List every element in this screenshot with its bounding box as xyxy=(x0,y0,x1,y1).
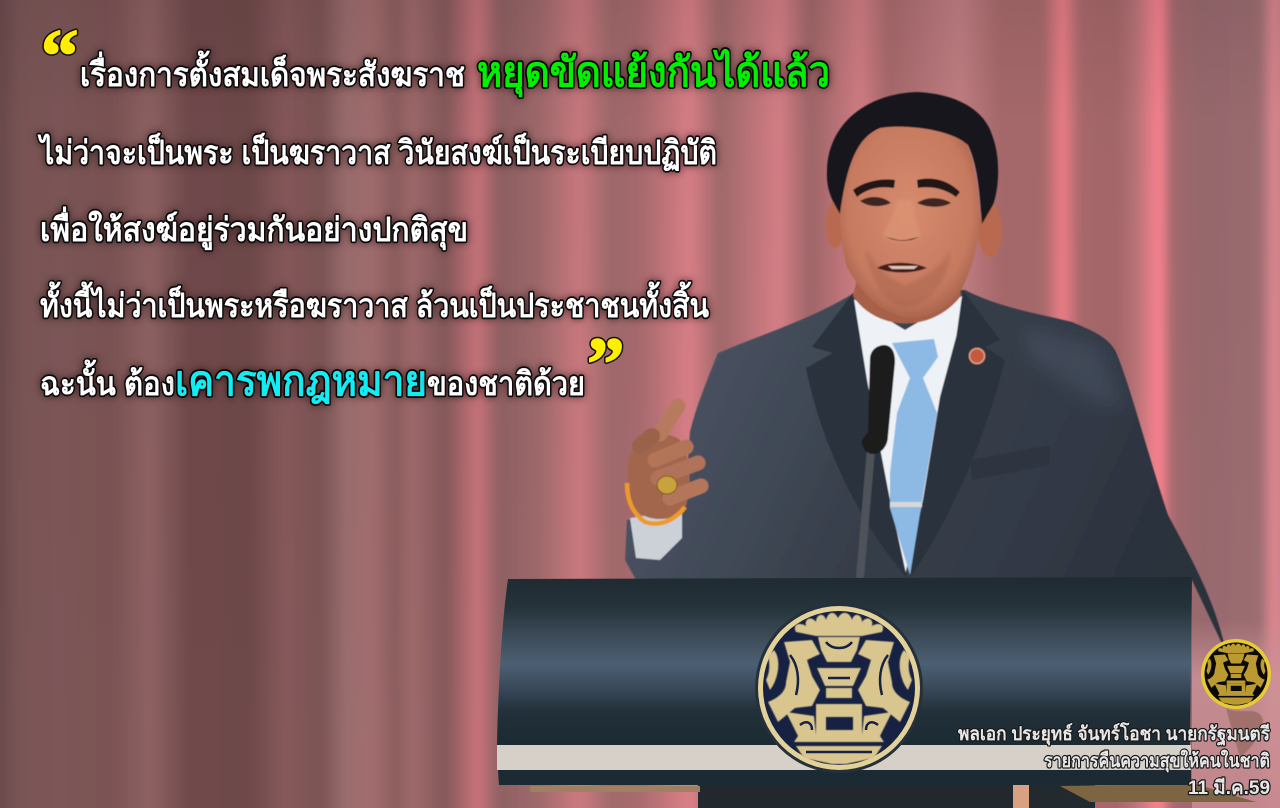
white stripe xyxy=(497,745,1191,770)
mouth xyxy=(877,263,927,272)
shirt xyxy=(852,296,962,575)
hand xyxy=(628,406,701,519)
podium xyxy=(497,577,1256,808)
neck xyxy=(853,275,961,323)
attribution: 11 มี.ค.59 xyxy=(1188,777,1270,799)
eyebrow right xyxy=(917,178,960,197)
face xyxy=(840,120,979,318)
ear right xyxy=(978,203,1002,257)
microphone stand xyxy=(856,448,875,578)
lapel pin xyxy=(970,348,984,364)
index finger xyxy=(640,436,652,446)
quote line 5: ฉะนั้น ต้อง xyxy=(40,359,175,402)
eyebrow left xyxy=(853,179,895,197)
thumb xyxy=(660,406,678,434)
quote line 1: เรื่องการตั้งสมเด็จพระสังฆราช xyxy=(80,50,465,93)
hair xyxy=(827,92,998,224)
emblem: small corner seal xyxy=(1201,639,1271,709)
lower band xyxy=(498,770,1191,785)
quote line 2: ไม่ว่าจะเป็นพระ เป็นฆราวาส วินัยสงฆ์เป็นระเบียบปฏิบัติ xyxy=(37,132,717,171)
highlight: green: หยุดขัดแย้งกันได้แล้ว xyxy=(477,48,830,98)
wooden ledge xyxy=(1060,784,1256,802)
right lapel xyxy=(910,290,1005,578)
quote line 1 xyxy=(80,48,830,98)
tie clip xyxy=(890,502,922,507)
necktie xyxy=(890,339,938,575)
quote line 4: ทั้งนี้ไม่ว่าเป็นพระหรือฆราวาส ล้วนเป็นประชาชนทั้งสิ้น xyxy=(40,281,709,324)
cheek shading xyxy=(866,250,950,307)
podium pillar xyxy=(698,785,1013,808)
quote line 5 xyxy=(40,358,585,404)
quote mark: opening: “ xyxy=(41,15,78,98)
emblem: large podium seal xyxy=(755,603,923,773)
small ledge xyxy=(530,786,700,792)
shoulder highlight xyxy=(1020,325,1125,410)
palm xyxy=(628,435,690,519)
quote mark: opening: “ xyxy=(41,15,78,98)
shirt cuff xyxy=(630,510,682,560)
bracelet xyxy=(627,483,685,524)
breast pocket xyxy=(970,445,1050,480)
ear left xyxy=(826,202,844,248)
microphone xyxy=(862,345,895,454)
ring xyxy=(657,476,677,494)
nose xyxy=(883,200,921,242)
seal navy details xyxy=(790,642,888,752)
fingers xyxy=(655,447,686,460)
quote mark: closing: ” xyxy=(587,323,624,406)
quote mark: closing: ” xyxy=(587,323,624,406)
pillar right xyxy=(1029,785,1095,808)
right hand xyxy=(1226,708,1263,757)
attribution xyxy=(958,722,1271,799)
quote line 5: ของชาติด้วย xyxy=(427,365,585,402)
suit jacket xyxy=(625,290,1226,652)
pillar post xyxy=(1013,785,1029,808)
podium body xyxy=(497,577,1192,745)
left lapel xyxy=(806,293,907,578)
eyes xyxy=(860,197,951,207)
highlight: cyan: เคารพกฎหมาย xyxy=(175,358,427,404)
quote line 3: เพื่อให้สงฆ์อยู่ร่วมกันอย่างปกติสุข xyxy=(40,206,468,251)
speaker figure xyxy=(625,92,1263,757)
